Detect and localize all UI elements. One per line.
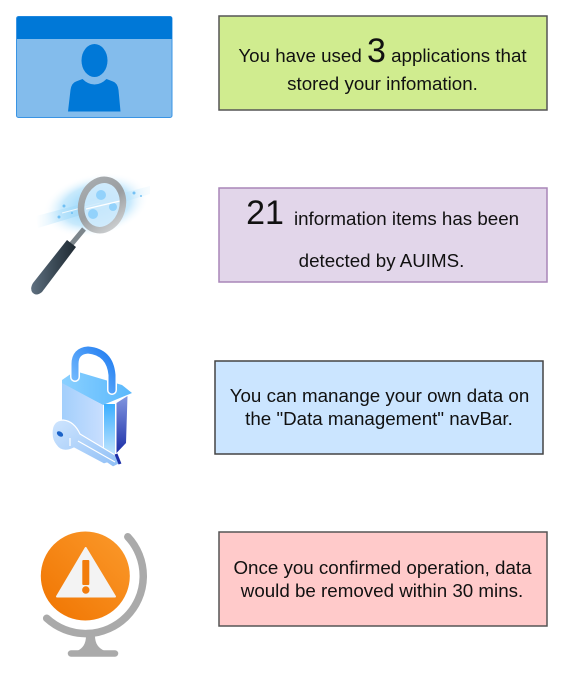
icon: warning globe [41,532,143,654]
icon: padlock with key [52,350,132,467]
text: applications message: stored your infomation. [287,73,478,94]
text: detected items message: detected by AUIMS. [299,250,464,271]
panel: detected items [219,188,547,282]
icon: magnifying glass over data [31,163,155,294]
text: removal warning message: Once you confirmed operation, data [233,557,532,578]
text: data management message: You can manange your own data on [230,385,529,406]
text: removal warning message: would be removed within 30 mins. [240,580,523,601]
text: data management message: the "Data management" navBar. [245,408,513,429]
panel: removal warning [219,532,547,626]
text: data management message [230,385,529,429]
panel: applications count [219,16,547,110]
text: removal warning message [233,557,532,601]
panel: data management [215,361,543,454]
text: detected items message: information items has been [294,208,519,229]
text: detected items message: 21 [246,194,284,232]
text: applications message [238,32,527,94]
icon: user profile window [16,16,172,118]
text: applications message: You have used 3 applications that [238,32,527,70]
text: detected items message [246,194,519,271]
